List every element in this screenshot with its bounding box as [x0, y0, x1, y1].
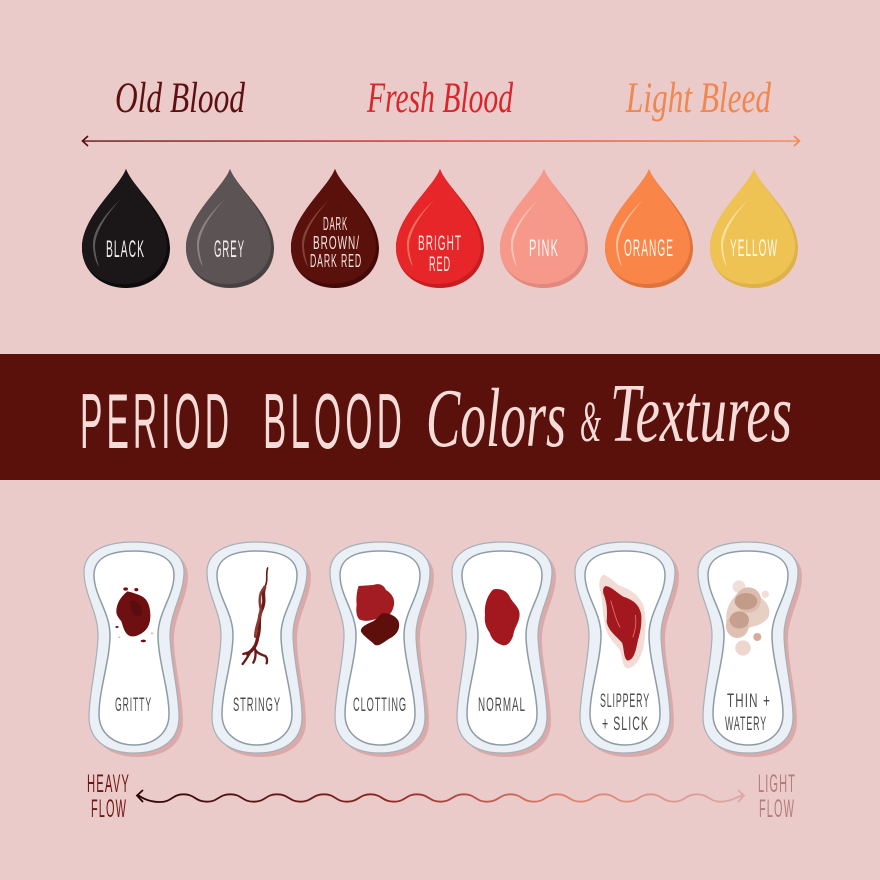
label: normal: NORMAL: [478, 695, 526, 716]
text: FLOW: [759, 795, 795, 823]
drop: dark brown / dark red: BROWN/: [313, 233, 360, 253]
drop: pink: [500, 169, 588, 288]
drop: orange: ORANGE: [624, 235, 674, 262]
heading: fresh blood: Fresh Blood: [366, 75, 513, 122]
drop: dark brown / dark red: [291, 169, 379, 288]
label: heavy flow: [87, 770, 130, 823]
pad: stringy: STRINGY: [233, 695, 281, 716]
drop: pink: PINK: [529, 235, 559, 262]
drop: black: [82, 169, 170, 288]
pad: stringy: [207, 542, 311, 757]
pad: normal: [452, 542, 556, 757]
title: colors and textures: &: [580, 389, 601, 454]
stain: stringy: [243, 568, 268, 664]
pad: clotting: CLOTTING: [353, 695, 407, 716]
label: thin + watery: THIN +: [727, 691, 771, 712]
arrow: wavy flow: [137, 790, 744, 802]
drop: bright red: [396, 169, 484, 288]
arrow: colour scale: [82, 136, 800, 146]
drop: dark brown / dark red: DARK RED: [310, 251, 362, 271]
pad: slippery + slick: [575, 542, 679, 757]
text: HEAVY: [87, 770, 130, 798]
drop: orange: [605, 169, 693, 288]
stain: clotting: [356, 584, 399, 645]
text: FLOW: [91, 795, 127, 823]
stain: normal: [485, 589, 520, 645]
label: thin + watery: [725, 691, 771, 735]
text: LIGHT: [758, 770, 796, 798]
drop: yellow: YELLOW: [730, 235, 778, 262]
label: slippery + slick: + SLICK: [602, 714, 649, 735]
label: light flow: [758, 770, 796, 823]
pad: gritty: [84, 542, 188, 757]
title band: BLOOD: [263, 377, 406, 465]
drop: dark brown / dark red: DARK: [323, 214, 348, 234]
label: slippery + slick: [600, 691, 650, 735]
stain: gritty: [115, 587, 153, 642]
drop: yellow: [710, 169, 798, 288]
heading: light bleed: Light Bleed: [625, 75, 771, 122]
title: colors and textures: Colors: [426, 372, 566, 465]
title: period blood: PERIOD: [80, 377, 233, 465]
pad: thin + watery: [698, 542, 802, 757]
drop: bright red: BRIGHT: [418, 232, 462, 255]
pad: gritty: GRITTY: [115, 695, 152, 716]
title: colors and textures: [426, 367, 792, 465]
drop: grey: [186, 169, 274, 288]
stain: slippery: [599, 574, 646, 668]
drop: grey: GREY: [214, 236, 245, 263]
label: thin + watery: WATERY: [725, 714, 767, 735]
stain: thin + watery: [726, 580, 769, 656]
pad: clotting: [330, 542, 434, 757]
drop: bright red: RED: [429, 253, 451, 276]
heading: old blood: Old Blood: [115, 75, 245, 122]
drop: black: BLACK: [106, 236, 145, 263]
title band: [0, 354, 880, 480]
pad: slippery + slick: SLIPPERY: [600, 691, 650, 712]
